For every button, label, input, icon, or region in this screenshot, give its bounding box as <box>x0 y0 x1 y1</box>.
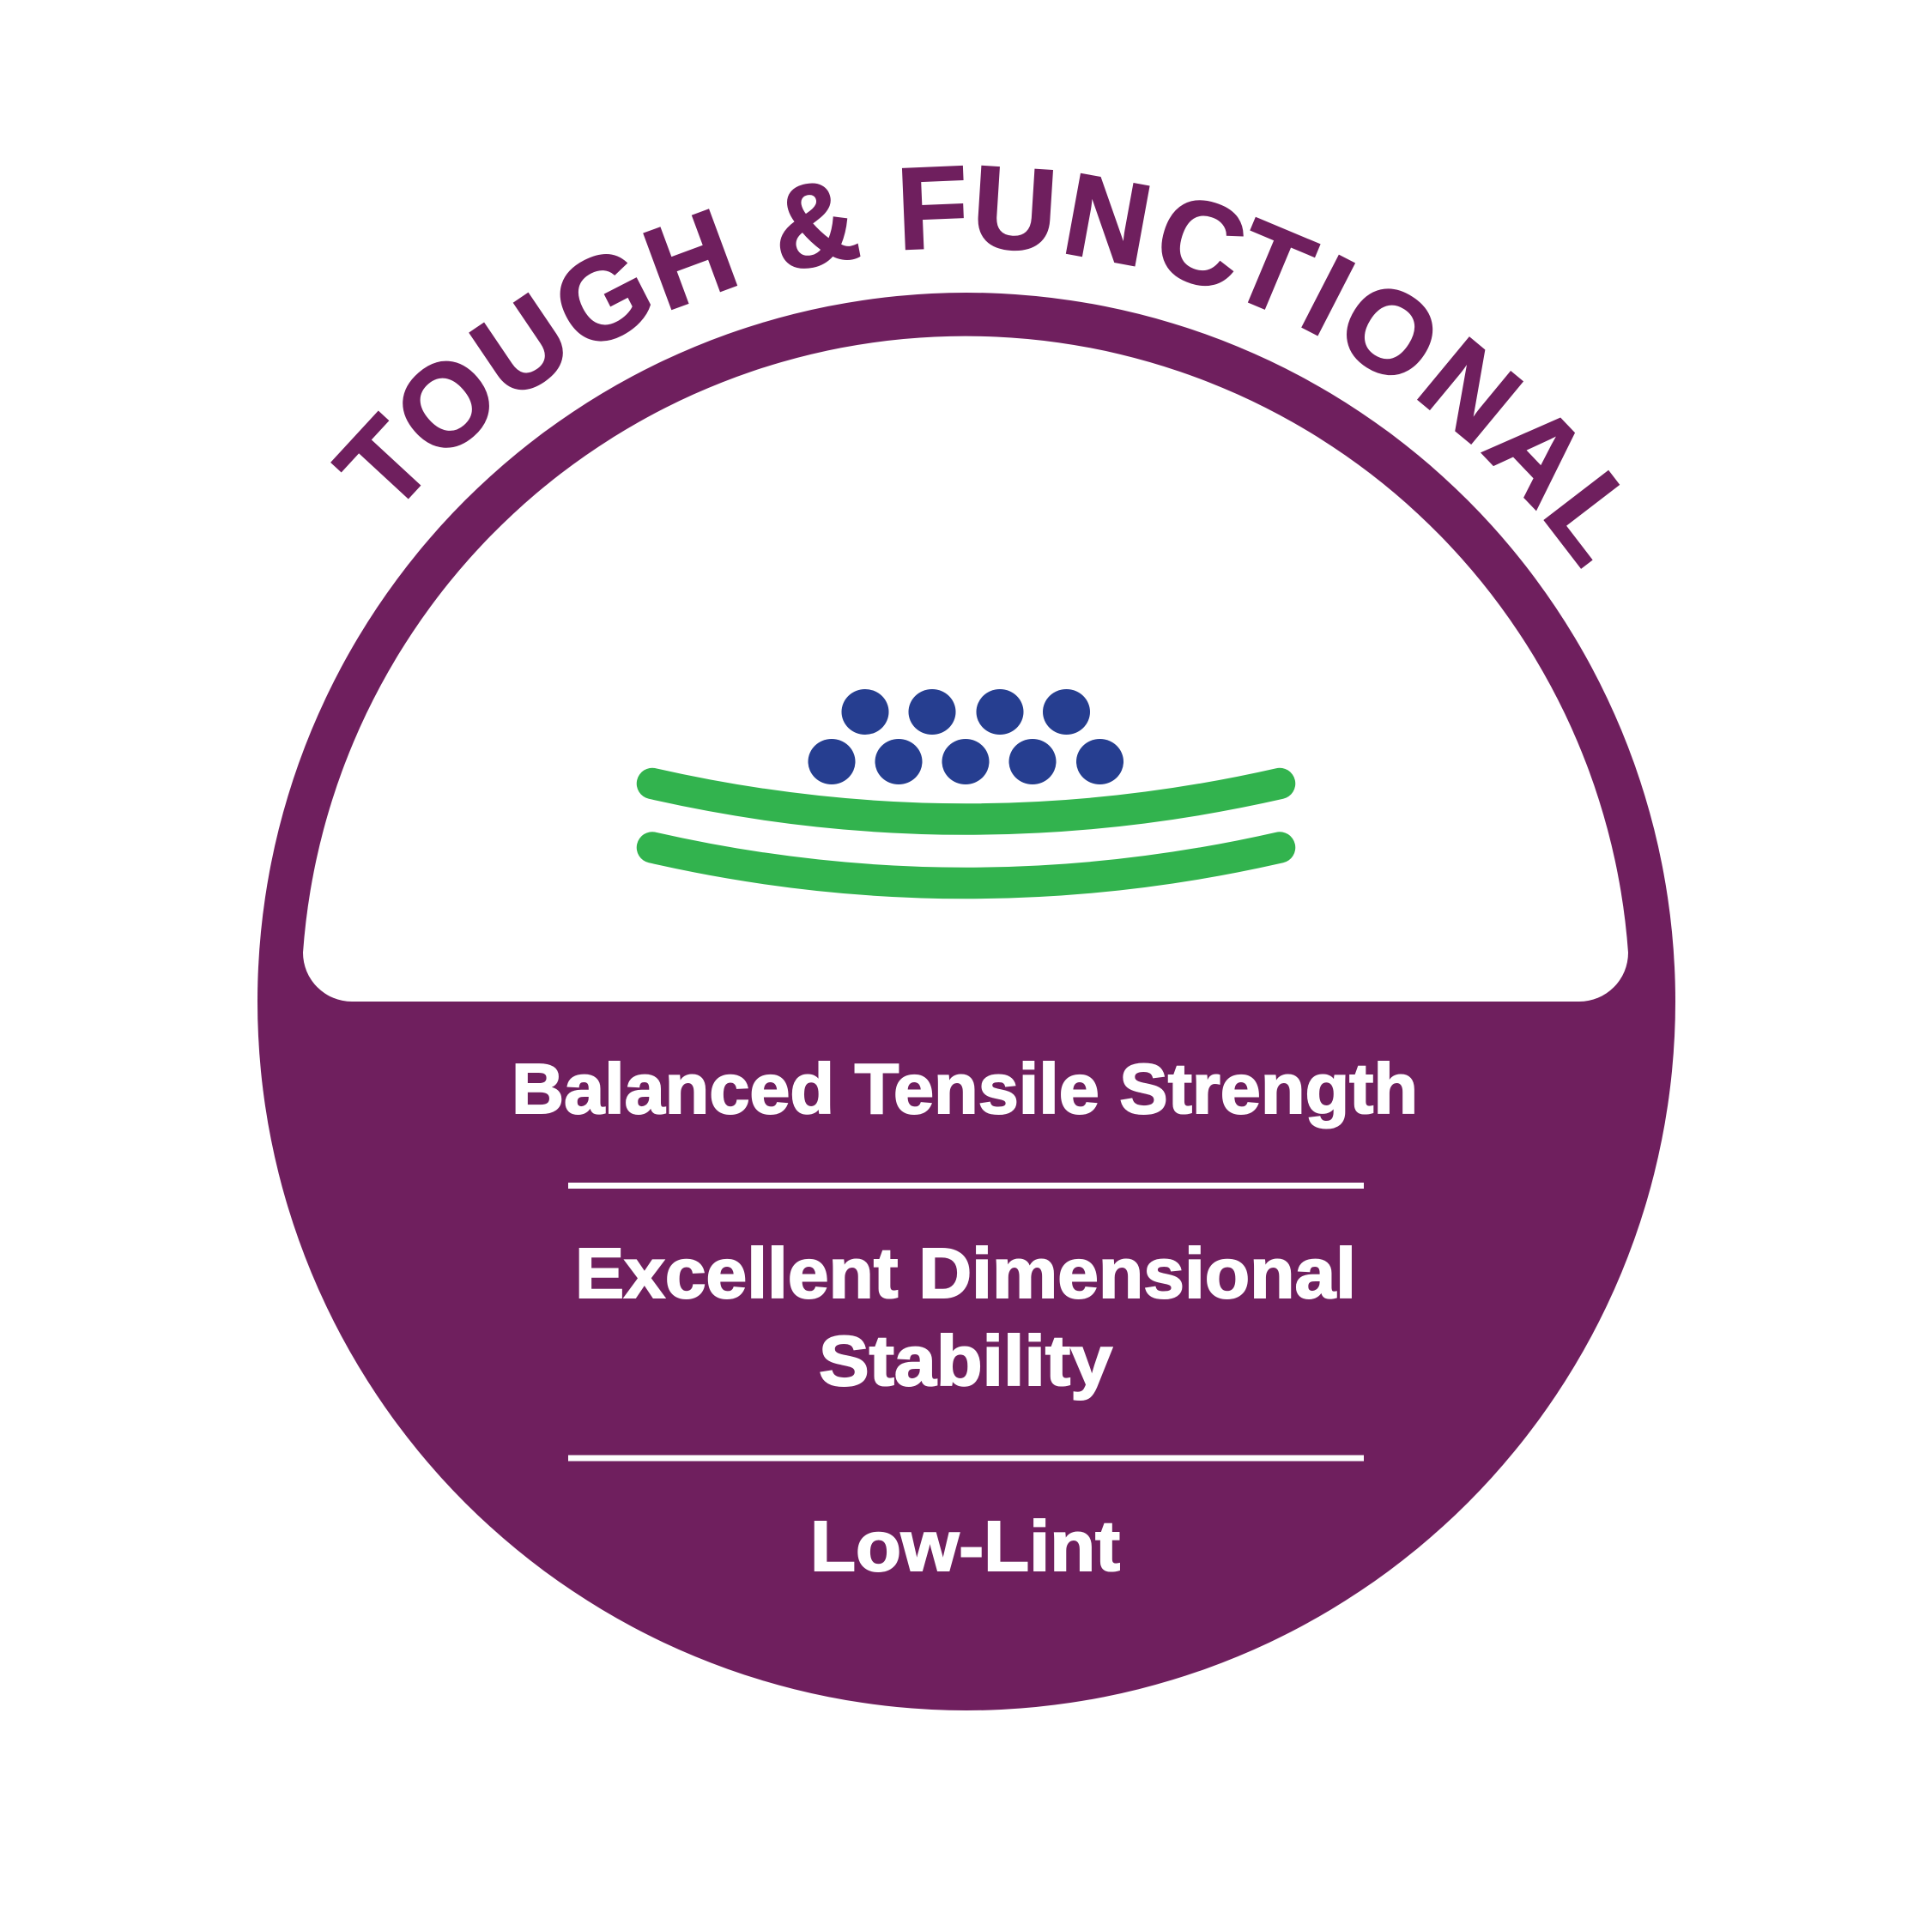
icon: blue fibre dots <box>809 689 1123 784</box>
icon: fibres on fabric layers <box>652 689 1280 883</box>
text: excellent dimensional stability: Stability <box>819 1321 1112 1401</box>
divider two <box>568 1456 1364 1461</box>
purple circle badge <box>257 293 1675 1710</box>
text: excellent dimensional stability <box>575 1233 1356 1401</box>
text: excellent dimensional stability: Excellent Dimensional <box>575 1233 1356 1313</box>
white upper window <box>303 336 1628 1002</box>
text: low-lint: Low-Lint <box>810 1506 1120 1586</box>
icon: green fabric layers <box>652 784 1280 883</box>
divider one <box>568 1183 1364 1189</box>
heading: curved title: FUNCTIONAL <box>901 165 1620 569</box>
heading: curved title: TOUGH & <box>330 184 860 499</box>
text: balanced tensile strength: Balanced Tensile Strength <box>512 1049 1418 1129</box>
